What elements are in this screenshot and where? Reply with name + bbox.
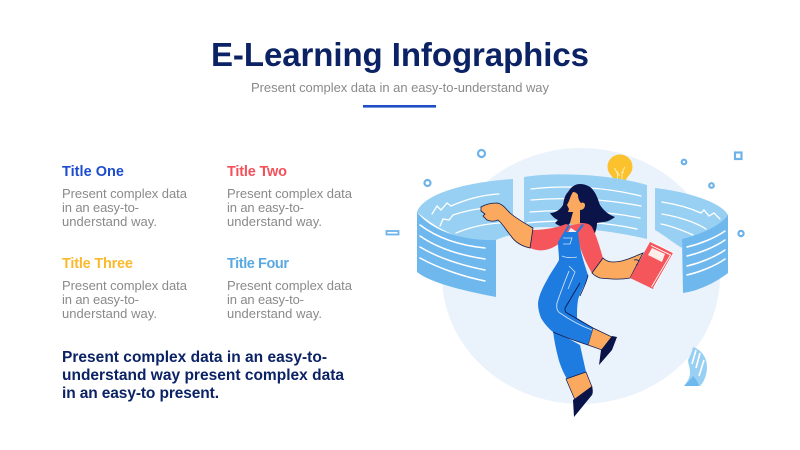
text block: title one: Present complex data [62,186,188,201]
icon: book [630,242,674,289]
text block: title three [62,256,188,321]
text block: title four: in an easy-to- [227,292,304,307]
illustration: e-learning [386,148,744,417]
right screen panel [655,188,728,293]
text block: title two: Present complex data [227,186,353,201]
title: E-Learning Infographics [211,36,589,73]
hair [550,184,615,233]
text block: title four: Present complex data [227,278,353,293]
text block: title three: Title Three [62,256,133,272]
text block: title two: understand way. [227,214,322,229]
text block: title three: understand way. [62,306,157,321]
text block: title one: understand way. [62,214,157,229]
person [481,184,643,417]
icon: leaf [684,347,707,386]
finger detail [634,260,639,265]
text block: title two: in an easy-to- [227,200,304,215]
text block: title one: in an easy-to- [62,200,139,215]
left sleeve [530,224,572,250]
back lower leg [553,330,586,379]
overalls seams [553,238,593,345]
summary text: Present complex data in an easy-to- [62,349,327,366]
text block: title four: understand way. [227,306,322,321]
text block: title two: Title Two [227,164,287,180]
background circle [442,148,720,404]
text block: title one [62,164,188,229]
text block: title one: Title One [62,164,124,180]
decorative shapes [386,150,744,236]
summary text [62,349,344,402]
text block: title three: in an easy-to- [62,292,139,307]
icon: light bulb [608,154,632,189]
right arm and hand [592,253,643,279]
middle screen panel [524,174,647,239]
title underline [363,105,436,108]
text block: title two [227,164,353,229]
front shoe [599,336,617,365]
back foot [566,372,592,400]
left screen panel [417,179,513,297]
back shoe [573,386,593,417]
subtitle: Present complex data in an easy-to-understand way [251,80,550,95]
left arm and hand [481,203,533,248]
summary text: in an easy-to present. [62,385,219,402]
text block: title four [227,256,353,321]
text block: title four: Title Four [227,256,289,272]
front foot [588,328,612,350]
overalls body [538,224,593,345]
summary text: understand way present complex data [62,367,344,384]
right sleeve [568,223,603,273]
face and neck [567,192,585,225]
text block: title three: Present complex data [62,278,188,293]
